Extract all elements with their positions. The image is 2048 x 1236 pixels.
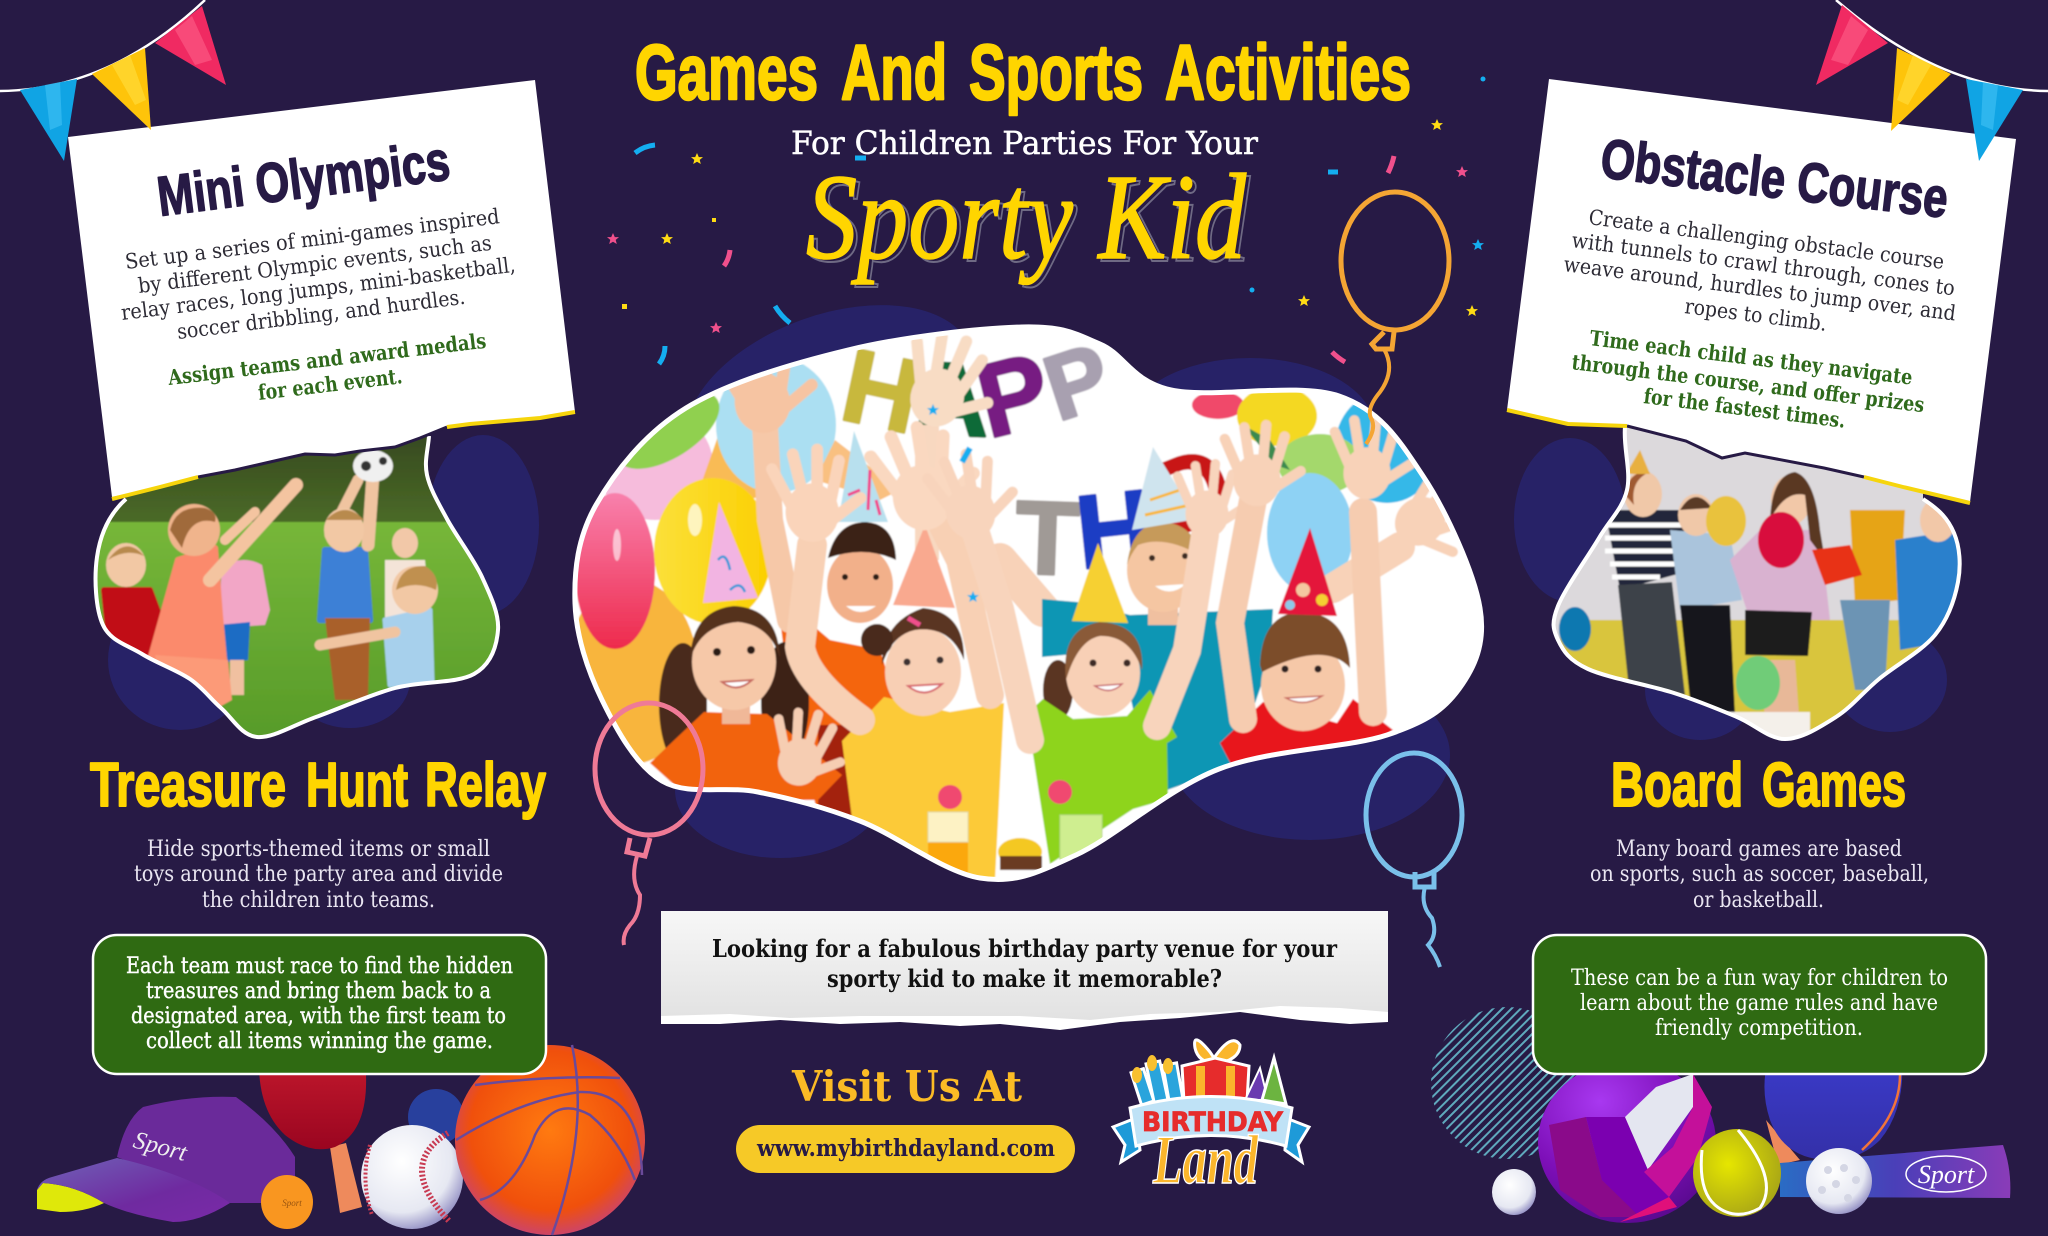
callout: Treasure Hunt green box: treasures and bring them back to a [146,979,491,1004]
website pill [736,1125,1075,1173]
section: Treasure Hunt Relay heading: Treasure [90,751,286,820]
panel: venue question torn paper: sporty kid to make it memorable? [827,964,1222,993]
banner letters: D [1135,424,1248,559]
sports equipment right [1430,1005,2010,1223]
striped girl [1605,450,1692,695]
yellow balloon [1706,496,1746,546]
photo balloons [566,357,1439,764]
green callout text [1570,325,1926,433]
body text: ropes to climb. [1683,294,1828,336]
green balloon [1736,656,1780,710]
Board Games description [1590,837,1929,913]
boy in orange shirt [716,327,1003,820]
pink sweater girl [1730,472,1830,730]
main photo: children party [560,320,1500,890]
section: Treasure Hunt Relay heading: Hunt [306,751,408,820]
banner letters: T [1013,480,1081,598]
sports equipment left [37,1045,645,1235]
blue shirt boy [1895,498,1960,650]
logo wordmark: Birthday: BIRTHDAY [1142,1107,1283,1138]
Board Games description: or basketball. [1693,888,1824,913]
Treasure Hunt description: toys around the party area and divide [134,862,503,887]
bat: Sport [1918,1160,1975,1189]
basketball [455,1045,645,1235]
boy in red [1220,418,1411,768]
callout: Board Games green box: These can be a fun way for children to [1571,966,1948,991]
body text: Set up a series of mini-games inspired [124,204,501,274]
right photo outline [1554,427,1960,739]
balloon outline: orange [1341,192,1449,444]
logo: Birthday Land [1113,1040,1309,1199]
gift box [1182,1040,1249,1102]
bunting right [1816,0,2048,161]
balloon outline: pink [595,703,703,945]
callout: Board Games green box: friendly competition. [1655,1016,1863,1041]
bat [1780,1145,2010,1198]
panel: Mini Olympics card [68,80,575,499]
soccer ball [353,450,393,482]
tiny white ball [1492,1169,1536,1215]
hatched circle [1430,1005,1585,1162]
red balloon [1758,512,1804,568]
small orange ball: Sport [282,1198,302,1208]
banner letters: H [832,327,930,456]
panel: venue question torn paper [661,911,1388,1030]
confetti [607,76,1486,364]
candles [1131,1061,1184,1105]
tennis ball [1693,1129,1781,1217]
blue balloon [1559,607,1591,651]
blue shirt kid [320,475,373,700]
gift [1812,545,1862,585]
girl with pigtails [650,502,849,800]
banner letters: H [1071,469,1158,592]
body text [1562,205,1957,336]
left photo: kids playing ball [94,436,500,740]
Treasure Hunt description: Hide sports-themed items or small [147,837,490,862]
panel: Obstacle Course card [1507,79,2016,503]
section: Board Games heading [1611,751,1906,820]
Board Games description: on sports, such as soccer, baseball, [1590,862,1929,887]
title [635,28,1411,288]
banner letters: A [912,341,991,459]
body text: weave around, hurdles to jump over, and [1562,252,1957,325]
body text: soccer dribbling, and hurdles. [176,285,466,344]
body text [120,204,517,344]
title: Games [635,28,818,116]
callout: Treasure Hunt green box [93,935,546,1074]
back girl [384,527,427,618]
light blue shirt kid [320,566,438,685]
body text: Create a challenging obstacle course [1587,205,1946,274]
visit us at: Visit Us At [791,1062,1023,1111]
green callout text: Assign teams and award medals [166,328,487,390]
Treasure Hunt description [134,837,503,913]
body text: relay races, long jumps, mini-basketball, [120,253,517,325]
title: And [841,28,947,116]
section: Treasure Hunt Relay heading [90,751,546,820]
girl in green [946,448,1238,864]
pink hat behind [893,525,955,608]
green callout text: Time each child as they navigate [1588,325,1914,390]
title: Sports [969,28,1143,116]
subtitle: For Children Parties For Your [791,124,1259,162]
callout: Treasure Hunt green box: collect all items winning the game. [146,1029,493,1054]
green callout text: through the course, and offer prizes [1570,349,1926,417]
banner letters: P [966,331,1061,461]
section: Board Games heading: Board [1611,751,1743,820]
party table [1727,710,1812,737]
logo wordmark: Land: Land [1152,1122,1259,1199]
callout: Treasure Hunt green box: designated area, with the first team to [131,1004,506,1029]
website pill: www.mybirthdayland.com [756,1135,1055,1162]
callout: Treasure Hunt green box: Each team must race to find the hidden [126,954,513,979]
golf ball [1806,1148,1872,1214]
red shirt kid [104,543,163,660]
cap: Sport [130,1127,191,1167]
blue paddle [1764,1060,1902,1165]
banner letters: P [1032,325,1122,441]
pink shirt kid [218,560,270,695]
photo outline [575,327,1482,880]
section: Board Games heading: Games [1762,751,1906,820]
title: Activities [1165,28,1411,116]
panel: venue question torn paper: Looking for a fabulous birthday party venue for your [712,934,1337,963]
callout: Board Games green box: learn about the game rules and have [1580,991,1938,1016]
girl in yellow [771,417,1004,880]
heading: Mini Olympics [154,129,453,228]
blue background blobs [108,269,1947,858]
coral shirt kid [150,485,296,715]
paddle [259,1060,366,1213]
left photo outline [96,436,498,737]
green callout text [166,328,487,405]
boy in shirt [1670,494,1742,715]
right photo: teens with balloons [1550,420,1970,745]
yellow shirt girl [1840,510,1905,690]
volleyball [1538,1061,1716,1223]
green callout text: for each event. [257,363,404,405]
body text: by different Olympic events, such as [137,231,493,298]
cap [37,1097,295,1222]
callout: Board Games green box [1533,935,1986,1074]
confetti over photo [908,404,979,625]
body text: with tunnels to crawl through, cones to [1570,228,1956,300]
green callout text: for the fastest times. [1642,383,1847,433]
script title: Sporty Kid [806,150,1247,285]
blond boy [1000,447,1490,790]
small orange ball [261,1175,313,1229]
drinks and cupcake [928,780,1102,885]
heading: Obstacle Course [1598,126,1952,230]
ribbon [1113,1096,1309,1162]
party hats [1245,1068,1268,1100]
baseball [361,1125,463,1229]
peach hat behind blue hat [822,440,892,500]
Board Games description: Many board games are based [1616,837,1902,862]
banner letters [842,346,1226,576]
bunting left [0,0,226,161]
section: Treasure Hunt Relay heading: Relay [425,751,546,820]
script title shadow: Sporty Kid [810,153,1251,288]
balloon outline: blue [1366,753,1462,967]
glow [408,1089,464,1145]
Treasure Hunt description: the children into teams. [202,888,435,913]
